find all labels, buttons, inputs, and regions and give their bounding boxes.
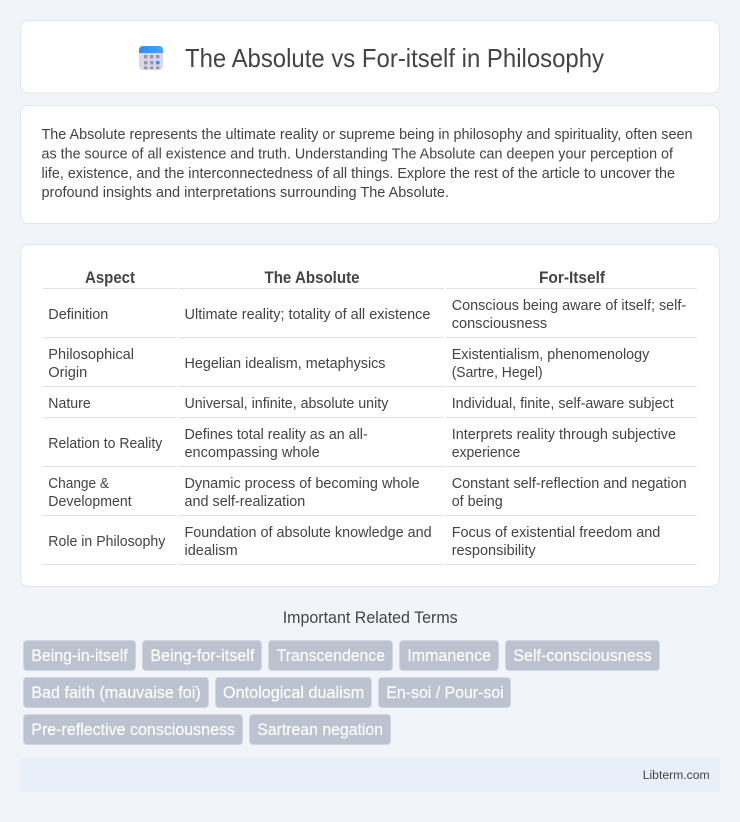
table header row: For-Itself [539,269,605,287]
table row: role in philosophy: idealism [184,543,238,559]
heading: important related terms: Important Related Terms [283,609,458,627]
table row: relation to reality: Defines total reality as an all- [184,427,368,443]
table row: philosophical origin: Existentialism, phenomenology [452,347,650,363]
footer credit: Libterm.com [643,768,710,782]
table row: philosophical origin [48,347,650,381]
tag: Transcendence [277,646,385,665]
table row: definition [48,298,686,332]
table row: relation to reality: Interprets reality through subjective [452,427,676,443]
panel: intro paragraph [20,106,720,224]
table row: change and development: of being [452,494,503,510]
table row: definition: Definition [48,307,108,323]
table header row: The Absolute [264,269,360,287]
table row: nature: Universal, infinite, absolute unity [184,396,389,412]
table row: change and development [48,476,687,510]
tag [268,640,392,670]
table header row: Aspect [85,269,135,287]
text block: intro [42,127,692,201]
table row: change and development: Constant self-reflection and negation [452,476,687,492]
footer bar [20,758,720,792]
table row: philosophical origin: Philosophical [48,347,134,363]
table row: nature: Nature [48,396,91,412]
tag: Being-for-itself [150,646,255,665]
tag: Pre-reflective consciousness [31,720,235,739]
tag: En-soi / Pour-soi [386,683,504,702]
tag [250,714,390,744]
table row: change and development: Development [48,494,132,510]
table row: philosophical origin: Hegelian idealism, metaphysics [184,356,386,372]
tag: Ontological dualism [223,683,364,702]
tag: Self-consciousness [513,646,652,665]
tag: Immanence [407,646,491,665]
panel: title header [20,20,720,93]
table row: nature [48,396,674,412]
table row: role in philosophy: Foundation of absolute knowledge and [184,525,432,541]
table row: role in philosophy [48,525,660,559]
text block: intro: as the source of all existence and truth. Understanding The Absolute can deepen your perception of [42,146,674,162]
table row: definition: Ultimate reality; totality of all existence [184,307,430,323]
tag [506,640,660,670]
table row: role in philosophy: Role in Philosophy [48,534,166,550]
table row: role in philosophy: responsibility [452,543,536,559]
tag [24,714,242,744]
table row: definition: Conscious being aware of itself; self- [452,298,686,314]
table row: relation to reality: encompassing whole [184,445,320,461]
icon: calendar [139,46,163,70]
panel: comparison table [20,244,720,586]
tag: Sartrean negation [257,720,383,739]
table row: nature: Individual, finite, self-aware subject [452,396,674,412]
table row: philosophical origin: Origin [48,365,87,381]
tag [142,640,262,670]
table header row [85,269,605,287]
title: The Absolute vs For-itself in Philosophy [185,43,604,73]
tags: related terms [24,640,660,744]
text block: intro: The Absolute represents the ultimate reality or supreme being in philosophy and spirituality, often seen [42,127,692,143]
tag [378,678,510,708]
table row: relation to reality [48,427,676,461]
text block: intro: profound insights and interpretations surrounding The Absolute. [42,185,449,201]
table row: relation to reality: experience [452,445,520,461]
table row: relation to reality: Relation to Reality [48,436,163,452]
tag [24,678,208,708]
tag [400,640,498,670]
table row: definition: consciousness [452,316,547,332]
table row: change and development: Dynamic process of becoming whole [184,476,420,492]
table row: role in philosophy: Focus of existential freedom and [452,525,660,541]
tag [24,640,136,670]
table row: change and development: Change & [48,476,109,492]
tag: Bad faith (mauvaise foi) [31,683,201,702]
table row: philosophical origin: (Sartre, Hegel) [452,365,543,381]
table row: change and development: and self-realization [184,494,305,510]
tag [216,678,372,708]
tag: Being-in-itself [31,646,128,665]
text block: intro: life, existence, and the interconnectedness of all things. Explore the rest of the article to uncover the [42,166,675,182]
